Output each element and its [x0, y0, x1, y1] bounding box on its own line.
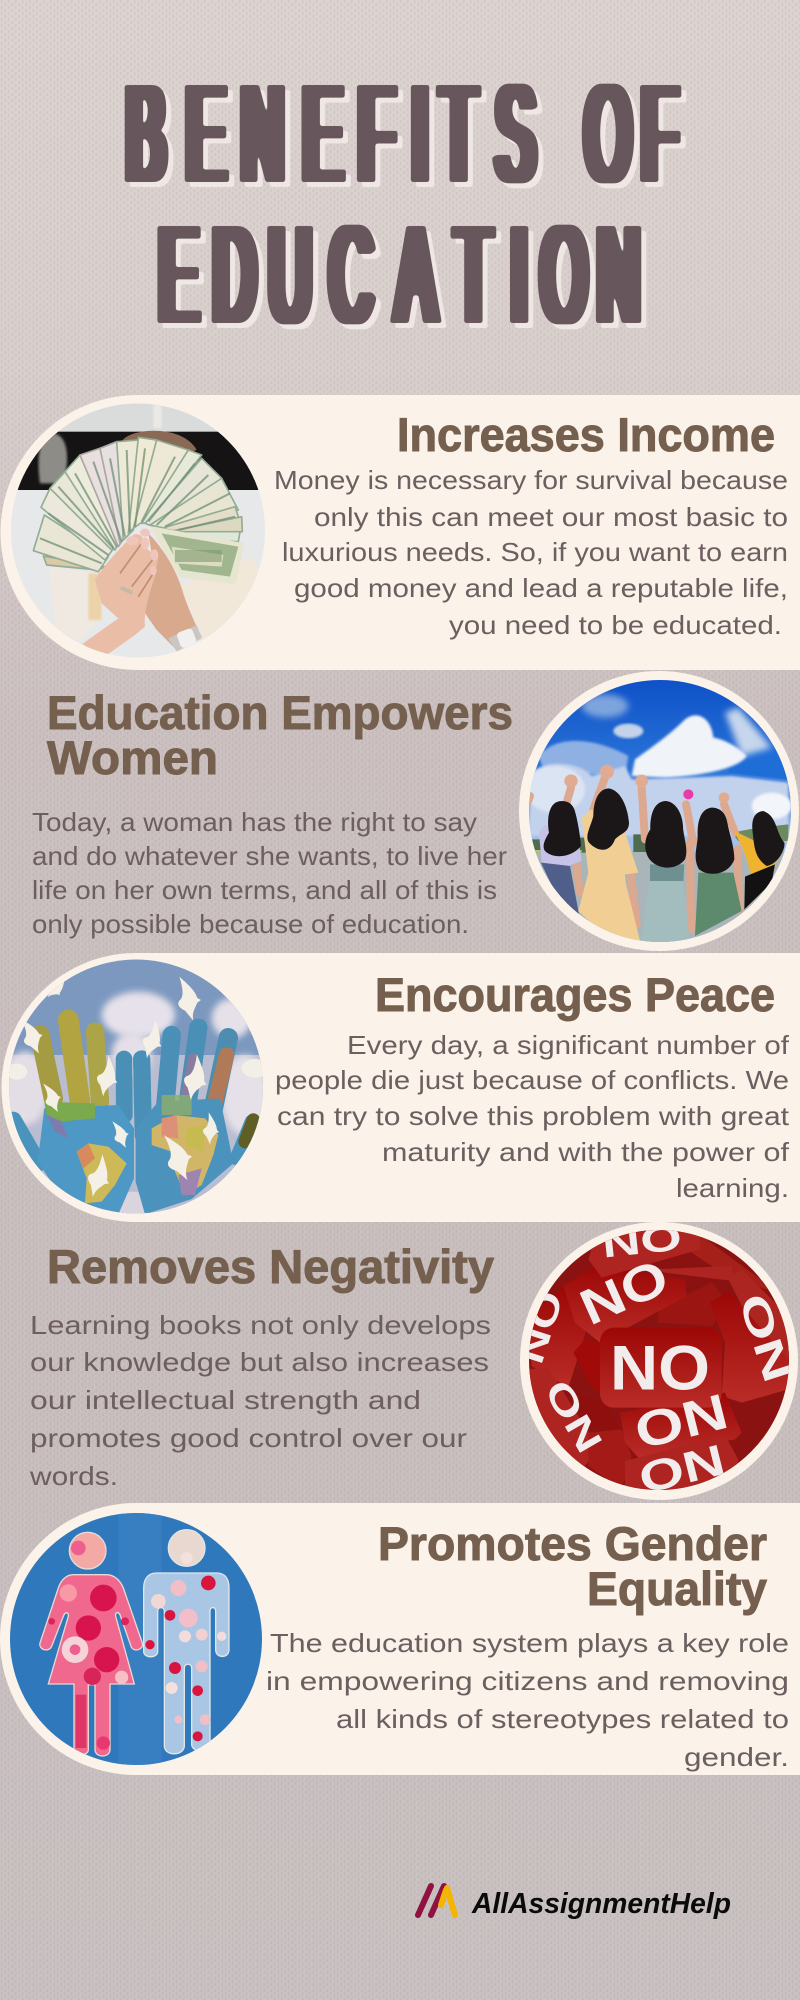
heading — [378, 1517, 767, 1615]
heading: Increases Income — [397, 408, 775, 461]
body text: our knowledge but also increases — [30, 1347, 489, 1377]
body text: gender. — [684, 1742, 789, 1772]
photo: pile of red NO tiles: NO — [600, 1216, 684, 1266]
woman figure — [40, 1532, 143, 1756]
body text: good money and lead a reputable life, — [294, 573, 788, 603]
photo ring — [520, 1222, 798, 1500]
title: EDUCATION — [159, 198, 640, 352]
body text — [275, 1030, 790, 1203]
panel: increases income — [0, 395, 800, 670]
body text: Today, a woman has the right to say — [32, 807, 477, 837]
body text: only possible because of education. — [32, 909, 469, 939]
body text: luxurious needs. So, if you want to earn — [282, 537, 788, 567]
body text: you need to be educated. — [449, 610, 782, 640]
icon: logo mark — [418, 1886, 455, 1915]
photo: world map painted hands with doves — [9, 960, 263, 1214]
heading: Removes Negativity — [47, 1240, 494, 1293]
body text: Every day, a significant number of — [347, 1030, 790, 1060]
woman 2 — [578, 809, 640, 941]
body text — [274, 465, 788, 640]
body text: maturity and with the power of — [382, 1137, 790, 1167]
panel: removes negativity — [29, 1216, 799, 1504]
doves — [48, 982, 64, 998]
body text: promotes good control over our — [30, 1423, 467, 1453]
body text: can try to solve this problem with great — [277, 1101, 790, 1131]
woman 1 — [539, 824, 582, 866]
photo: pile of red NO tiles: ON — [730, 1289, 799, 1388]
hair — [544, 788, 784, 874]
heading: Encourages Peace — [375, 968, 775, 1021]
photo ring — [519, 671, 799, 951]
body text: learning. — [676, 1173, 789, 1203]
photo: pile of red NO tiles: ON — [536, 1373, 610, 1460]
woman 4 — [695, 873, 742, 936]
body text — [266, 1628, 789, 1772]
body text: people die just because of conflicts. We — [275, 1065, 789, 1095]
body text: The education system plays a key role — [270, 1628, 789, 1658]
heading: Equality — [587, 1562, 767, 1615]
panel: encourages peace — [1, 953, 800, 1225]
photo: pile of red NO tiles: NO — [510, 1286, 571, 1368]
title: BENEFITS OF — [126, 57, 677, 211]
body text — [32, 807, 507, 939]
photo: pile of red NO tiles: ON — [629, 1383, 733, 1460]
heading: Promotes Gender — [378, 1517, 767, 1570]
panel: promotes gender equality — [0, 1503, 800, 1775]
photo: pile of red NO tiles: NO — [572, 1248, 677, 1336]
body text: Money is necessary for survival because — [274, 465, 788, 495]
body text: our intellectual strength and — [30, 1385, 421, 1415]
photo: hands holding a fan of money — [5, 400, 270, 665]
woman 3 — [650, 864, 684, 883]
photo: pile of red NO tiles: NO — [610, 1333, 710, 1403]
photo: pile of red NO tiles — [529, 1230, 789, 1490]
title — [126, 57, 677, 352]
logo: AllAssignmentHelp — [418, 1886, 731, 1920]
body text — [29, 1310, 491, 1491]
body text: in empowering citizens and removing — [266, 1666, 789, 1696]
photo: women waving under a blue sky — [525, 676, 797, 948]
heading: Education Empowers — [47, 686, 513, 739]
photo: pile of red NO tiles: ON — [634, 1436, 730, 1504]
heading: Women — [47, 731, 218, 784]
panel: education empowers women — [32, 671, 799, 951]
photo: floral woman and man figures on blue — [5, 1508, 267, 1770]
brand name: AllAssignmentHelp — [471, 1888, 731, 1920]
body text: life on her own terms, and all of this is — [32, 875, 497, 905]
body text: Learning books not only develops — [30, 1310, 491, 1340]
body text: only this can meet our most basic to — [314, 502, 788, 532]
body text: words. — [29, 1461, 118, 1491]
heading — [47, 686, 513, 784]
body text: all kinds of stereotypes related to — [336, 1704, 789, 1734]
raised arms — [527, 778, 739, 929]
man figure — [144, 1530, 229, 1754]
woman 5 — [734, 831, 778, 876]
body text: and do whatever she wants, to live her — [32, 841, 507, 871]
